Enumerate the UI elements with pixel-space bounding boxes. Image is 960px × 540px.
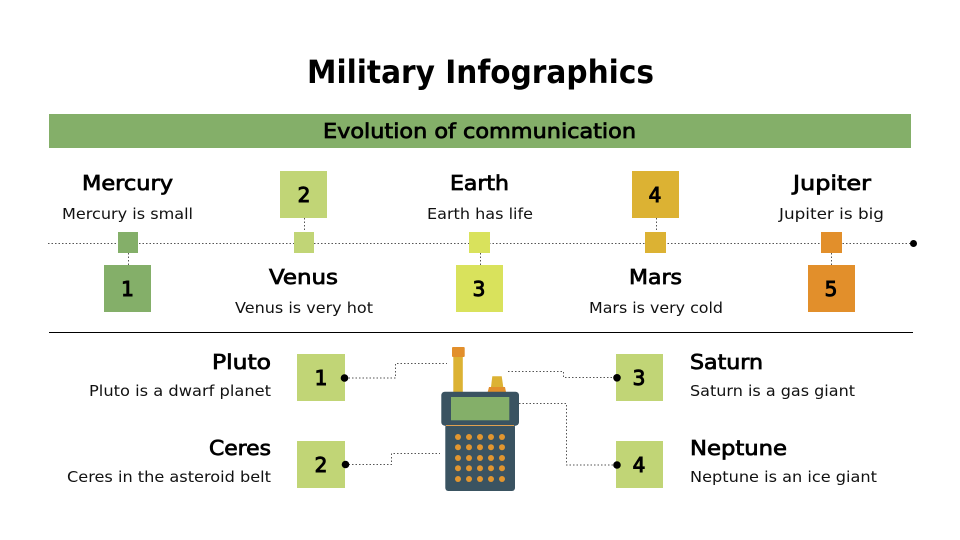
- timeline item: Mars: [589, 171, 723, 317]
- callout: Saturn: 3: [633, 366, 645, 390]
- callout: Saturn: Saturn is a gas giant: [690, 382, 855, 400]
- callout: Pluto: Pluto is a dwarf planet: [89, 382, 271, 400]
- timeline item: Venus: [235, 171, 373, 317]
- timeline item: Mercury: Mercury is small: [62, 205, 193, 223]
- icon: military radio: [441, 347, 519, 491]
- timeline item: Earth: [427, 171, 533, 312]
- timeline item: Mars: 4: [649, 183, 661, 207]
- timeline axis: [48, 240, 917, 247]
- timeline item: Mars: Mars: [629, 265, 682, 289]
- callout: Ceres: Ceres: [209, 436, 271, 460]
- callout: Neptune: [519, 404, 877, 488]
- callout: Ceres: [67, 436, 440, 488]
- timeline item: Earth: Earth: [450, 171, 509, 195]
- callout: Ceres: 2: [315, 453, 327, 477]
- callout: Ceres: Ceres in the asteroid belt: [67, 468, 271, 486]
- header band: Evolution of communication: [323, 119, 636, 143]
- callout: Saturn: Saturn: [690, 350, 763, 374]
- timeline item: Jupiter: 5: [825, 277, 837, 301]
- callout: Neptune: 4: [633, 453, 645, 477]
- timeline item: Jupiter: Jupiter: [791, 171, 872, 195]
- callout: Pluto: Pluto: [212, 350, 271, 374]
- header band: [49, 114, 911, 148]
- title: Military Infographics: [307, 53, 654, 91]
- timeline item: Mercury: [62, 171, 193, 312]
- callout: Saturn: [508, 350, 855, 401]
- callout: Neptune: Neptune: [690, 436, 787, 460]
- timeline item: Venus: Venus is very hot: [235, 299, 373, 317]
- callout: Pluto: [89, 350, 447, 401]
- timeline item: Venus: 2: [298, 183, 310, 207]
- callout: Neptune: Neptune is an ice giant: [690, 468, 877, 486]
- timeline item: Venus: Venus: [269, 265, 338, 289]
- timeline item: Mercury: 1: [121, 277, 134, 301]
- callout: Pluto: 1: [315, 366, 327, 390]
- timeline item: Earth: Earth has life: [427, 205, 533, 223]
- timeline item: Earth: 3: [473, 277, 485, 301]
- timeline item: Jupiter: [778, 171, 884, 312]
- timeline item: Jupiter: Jupiter is big: [778, 205, 884, 223]
- timeline item: Mars: Mars is very cold: [589, 299, 723, 317]
- timeline item: Mercury: Mercury: [82, 171, 173, 195]
